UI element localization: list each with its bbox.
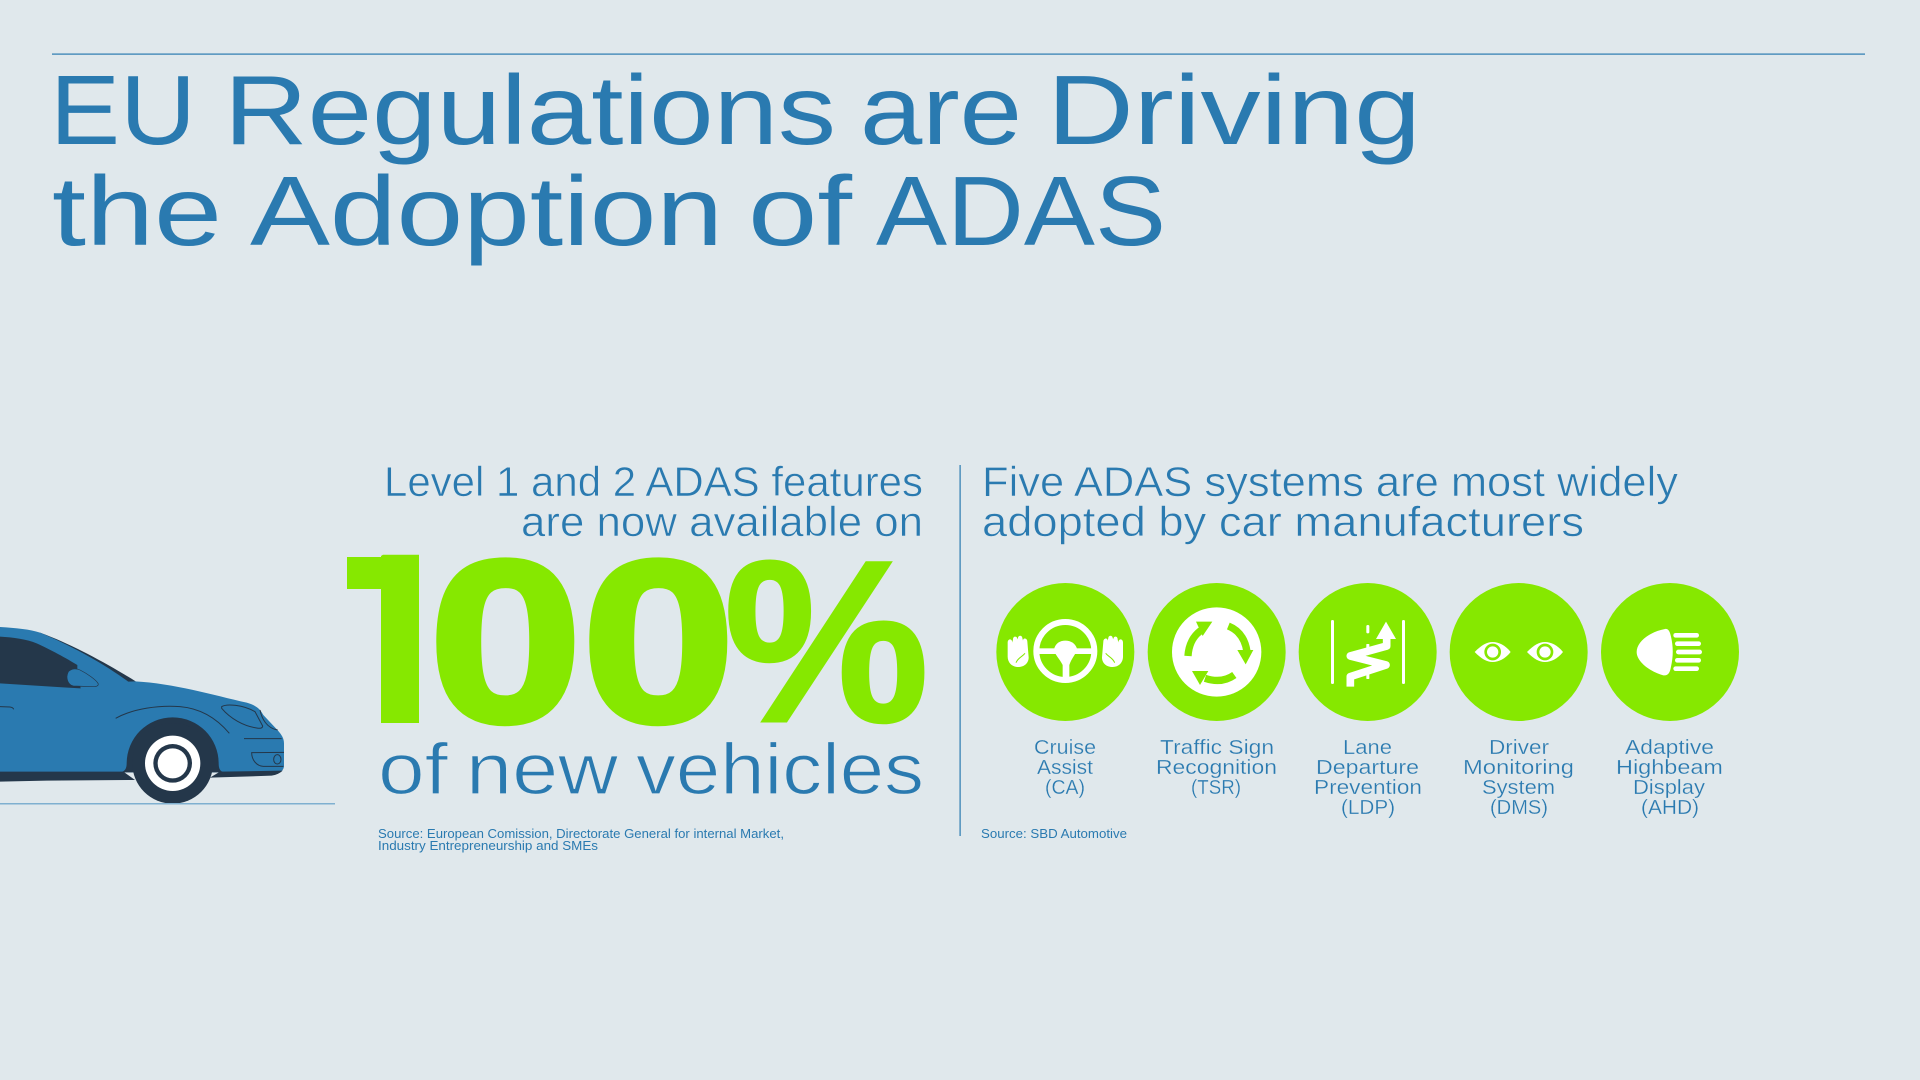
- label: lane departure prevention: Lane: [1343, 737, 1392, 759]
- label: cruise assist: Assist: [1037, 757, 1093, 779]
- label: driver monitoring system: Driver: [1489, 737, 1549, 759]
- car illustration: [0, 627, 284, 804]
- heading: right: adopted by car manufacturers: [982, 498, 1584, 545]
- big number: 100%: 1: [327, 509, 459, 774]
- label: driver monitoring system: Monitoring: [1463, 757, 1574, 779]
- source: right: Source: SBD Automotive: [981, 826, 1127, 841]
- label: lane departure prevention: [1314, 737, 1422, 819]
- title: ADAS: [876, 156, 1166, 266]
- label: driver monitoring system: System: [1482, 777, 1555, 799]
- source: left: Industry Entrepreneurship and SMEs: [378, 838, 599, 853]
- title: EU: [50, 55, 196, 165]
- source: left: Source: European Comission, Directorate General for internal Market,: [378, 826, 784, 841]
- heading: left statistic: are now available on: [521, 498, 923, 545]
- title: Adoption: [250, 156, 723, 266]
- label: traffic sign recognition: Recognition: [1156, 757, 1277, 779]
- label: traffic sign recognition: (TSR): [1191, 777, 1241, 799]
- heading: left statistic: [384, 458, 923, 545]
- label: lane departure prevention: Departure: [1316, 757, 1419, 779]
- text: of new vehicles: new: [466, 730, 619, 810]
- heading: right: Five ADAS systems are most widely: [982, 458, 1678, 505]
- title: are: [860, 55, 1022, 165]
- icon: adaptive highbeam display: [1601, 583, 1739, 721]
- label: adaptive highbeam display: Adaptive: [1625, 737, 1714, 759]
- heading: left statistic: Level 1 and 2 ADAS features: [384, 458, 923, 505]
- heading: right: [982, 458, 1678, 545]
- title: [50, 55, 1421, 266]
- label: adaptive highbeam display: [1616, 737, 1723, 819]
- title: of: [748, 156, 853, 266]
- big number: 100%: %: [724, 513, 929, 770]
- label: lane departure prevention: Prevention: [1314, 777, 1422, 799]
- big number: 100%: [347, 554, 924, 726]
- icon: lane departure prevention: [1299, 583, 1437, 721]
- text: of new vehicles: vehicles: [636, 730, 924, 810]
- title: the: [52, 156, 222, 266]
- label: traffic sign recognition: [1156, 737, 1277, 799]
- label: cruise assist: Cruise: [1034, 737, 1096, 759]
- label: lane departure prevention: (LDP): [1341, 797, 1395, 819]
- label: driver monitoring system: [1463, 737, 1574, 819]
- big number: 100%: 00: [429, 513, 735, 770]
- label: adaptive highbeam display: Highbeam: [1616, 757, 1723, 779]
- title: Regulations: [224, 55, 836, 165]
- label: adaptive highbeam display: (AHD): [1641, 797, 1699, 819]
- label: cruise assist: [1034, 737, 1096, 799]
- icon: traffic sign recognition: [1148, 583, 1286, 721]
- text: of new vehicles: of: [378, 730, 449, 810]
- icon: driver monitoring system: [1450, 583, 1588, 721]
- label: adaptive highbeam display: Display: [1633, 777, 1705, 799]
- title: Driving: [1047, 55, 1421, 165]
- icon: cruise assist: [996, 583, 1134, 721]
- label: traffic sign recognition: Traffic Sign: [1160, 737, 1274, 759]
- label: cruise assist: (CA): [1045, 777, 1085, 799]
- source: left: [378, 826, 784, 853]
- label: driver monitoring system: (DMS): [1490, 797, 1548, 819]
